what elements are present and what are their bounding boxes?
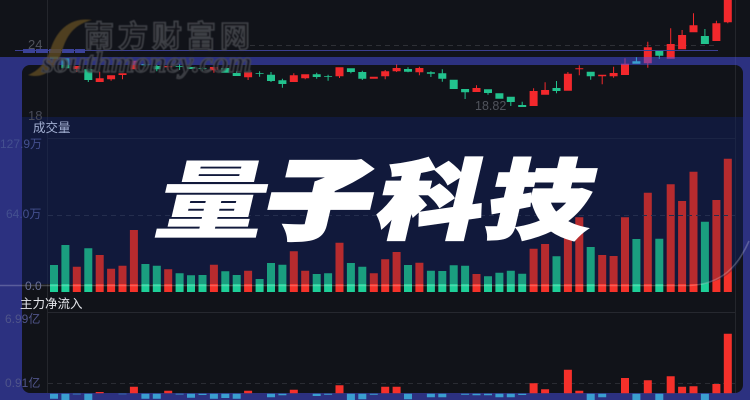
watermark: southmoney logo (28, 20, 254, 79)
heading: 成交量: 成交量 (33, 120, 71, 135)
title: 量子科技: 子 (257, 153, 384, 250)
candlestick chart: green candles (50, 29, 709, 107)
volume panel background (22, 117, 743, 284)
watermark: southmoney.com: southmoney.com (41, 46, 252, 79)
volume axis label: 64.0万: 64.0万 (6, 207, 41, 221)
volume axis label: 127.9万: 127.9万 (0, 137, 42, 151)
price label: 18.82 low: 18.82 (475, 99, 506, 113)
title: 量子科技: 量 (147, 155, 279, 250)
watermark crescent (28, 20, 92, 76)
title: 量子科技: 技 (479, 154, 604, 250)
heading: 主力净流入: 主力净流入 (20, 297, 83, 311)
price label: 18: 18 (28, 108, 42, 123)
price label: 24: 24 (28, 37, 42, 52)
panel highlight arc (0, 241, 749, 286)
candlestick chart: red candles (73, 0, 732, 106)
watermark: 南方财富网: 南方财富网 (84, 21, 254, 54)
inflow bars: blue (50, 394, 709, 400)
moving average line (15, 50, 718, 52)
inflow axis label: 6.99亿: 6.99亿 (5, 311, 40, 326)
title: 量子科技 (147, 153, 604, 250)
volume bars: green (50, 222, 709, 292)
title: 量子科技: 科 (369, 153, 496, 250)
inflow bars: red (96, 334, 732, 393)
volume bars: red (73, 159, 732, 292)
inflow axis label: 0.91亿: 0.91亿 (5, 375, 40, 390)
volume axis label: 0.0: 0.0 (25, 279, 42, 293)
candle under band: blue (632, 57, 640, 64)
